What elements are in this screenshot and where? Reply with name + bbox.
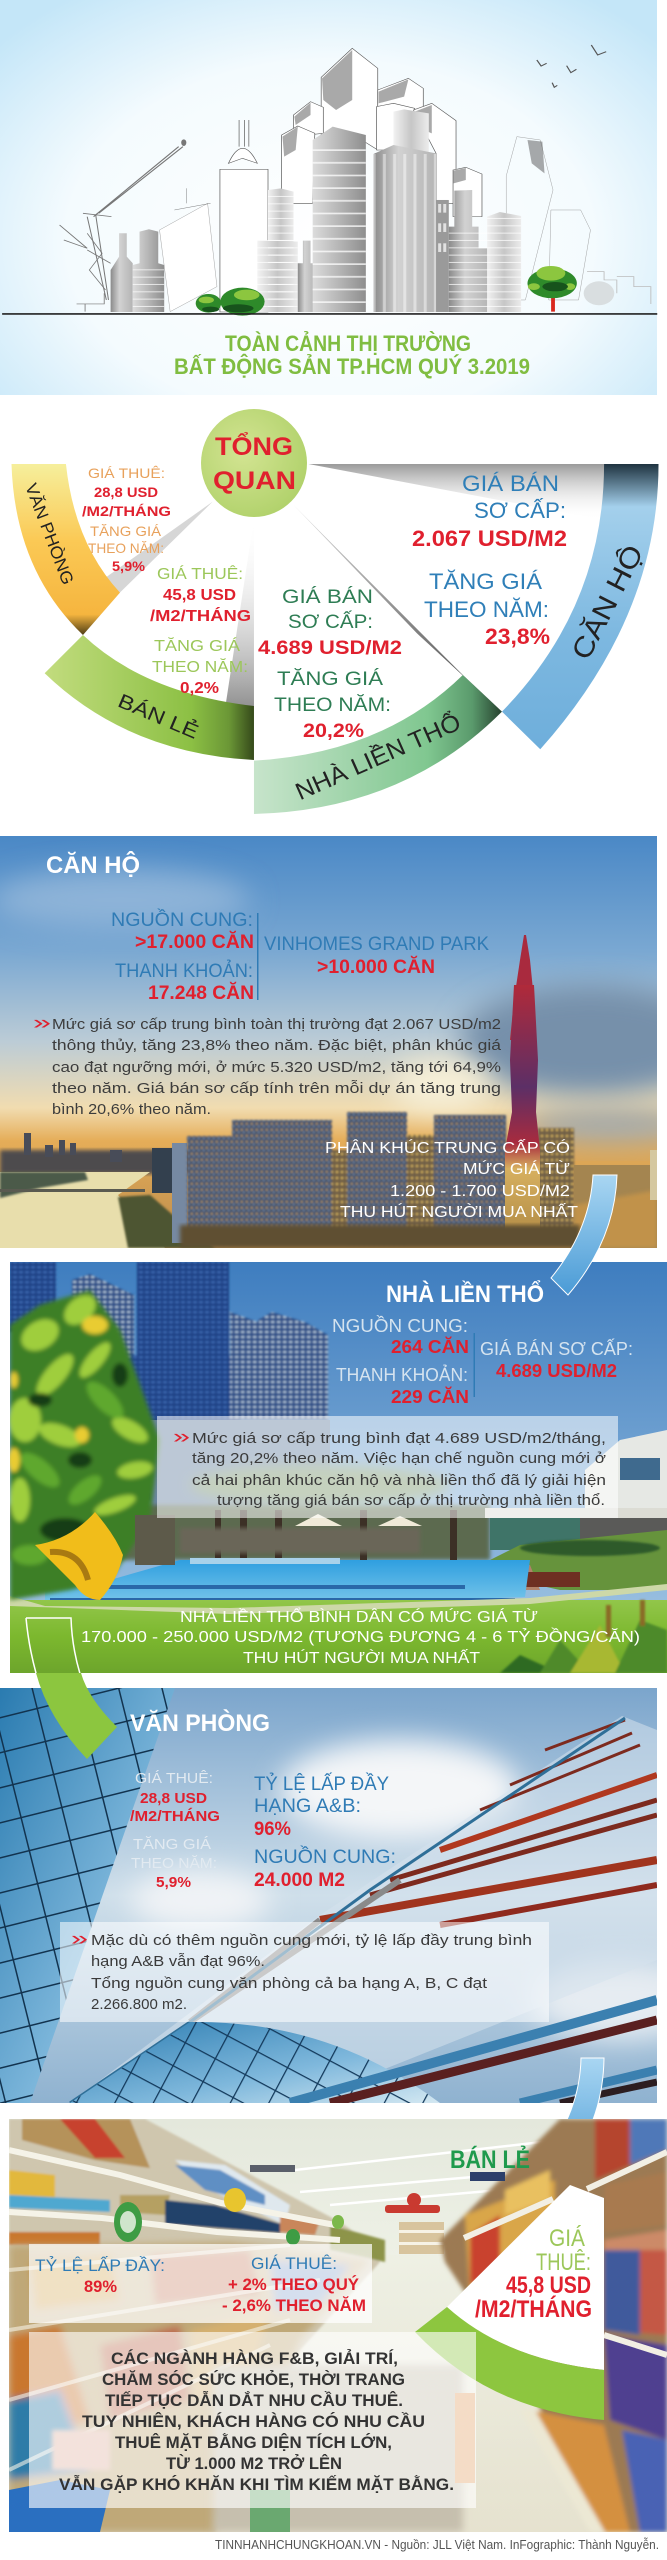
- callout box: price commentary: »: [173, 1427, 190, 1448]
- band label: Bán lẻ: BÁN LẺ: [115, 689, 202, 744]
- fan shading wedges and coloured bands: [11, 464, 659, 814]
- arrow: blue swoosh linking Văn phòng to Bán lẻ: [538, 2058, 604, 2179]
- stats: Văn phòng: THEO NĂM:: [88, 540, 164, 556]
- bullet paragraph: cao đạt ngưỡng mới, ở mức 5.320 USD/m2, tăng tới 64,9%: [52, 1059, 501, 1076]
- callout box: tenant demand commentary: VẪN GẶP KHÓ KHĂN KHI TÌM KIẾM MẶT BẰNG.: [59, 2475, 454, 2494]
- stats: occupancy and supply: 96%: [254, 1819, 291, 1840]
- callout box: occupancy commentary: 2.266.800 m2.: [91, 1996, 187, 2013]
- stats: Bán lẻ: 45,8 USD: [163, 587, 236, 604]
- photo: Saigon skyline at sunset: [0, 836, 667, 1248]
- fan segment: white wedge with green band: [415, 2185, 604, 2420]
- band label: Căn hộ: CĂN HỘ: [565, 540, 649, 665]
- photo: glass towers against the sky: [0, 1688, 667, 2103]
- photo: supermarket aisle: [9, 2119, 667, 2532]
- hero sky background: [0, 0, 657, 395]
- callout: mid-range segment: MỨC GIÁ TỪ: [463, 1159, 570, 1178]
- photo: villas, towers and pool: [8, 1262, 667, 1680]
- illustration: sketched city skyline: [2, 45, 657, 316]
- right shelving: [440, 2119, 667, 2532]
- stats: occupancy and supply: 24.000 M2: [254, 1870, 345, 1891]
- bullet paragraph: bình 20,6% theo năm.: [52, 1101, 211, 1118]
- band label: Văn phòng: VĂN PHÒNG: [21, 481, 77, 587]
- callout box: price commentary: tượng tăng giá bán sơ cấp ở thị trường nhà liền thổ.: [217, 1492, 605, 1509]
- stats: Bán lẻ: 0,2%: [180, 680, 219, 697]
- callout box: tenant demand commentary: CÁC NGÀNH HÀNG F&B, GIẢI TRÍ,: [111, 2349, 398, 2368]
- stats: supply, liquidity and price: GIÁ BÁN SƠ CẤP:: [480, 1338, 633, 1359]
- stats: Căn hộ: THEO NĂM:: [424, 597, 549, 622]
- stats: rent and growth: GIÁ THUÊ:: [135, 1770, 213, 1787]
- band label: Nhà liền thổ: NHÀ LIỀN THỔ: [291, 708, 465, 806]
- callout: popular price range: NHÀ LIỀN THỔ BÌNH DÂN CÓ MỨC GIÁ TỪ: [180, 1607, 538, 1626]
- callout box: tenant demand commentary: TUY NHIÊN, KHÁCH HÀNG CÓ NHU CẦU: [82, 2412, 425, 2431]
- heading: NHÀ LIỀN THỔ: [386, 1280, 544, 1308]
- stats: Bán lẻ: TĂNG GIÁ: [154, 636, 240, 655]
- stats: supply and liquidity: [111, 909, 489, 1004]
- callout box: tenant demand commentary: TỪ 1.000 M2 TRỞ LÊN: [166, 2454, 342, 2473]
- panel: Căn hộ: [0, 836, 667, 1248]
- callout: mid-range segment: THU HÚT NGƯỜI MUA NHẤT: [340, 1202, 578, 1221]
- stats: Bán lẻ: GIÁ THUÊ:: [157, 564, 243, 583]
- circle: Tổng quan: QUAN: [213, 467, 296, 495]
- stats: rent and growth: [130, 1770, 220, 1891]
- stats: rent and growth: THEO NĂM:: [131, 1855, 217, 1872]
- bullet paragraph: theo năm. Giá bán sơ cấp tính trên mỗi dự án tăng trung: [52, 1080, 501, 1097]
- callout box: occupancy commentary: [60, 1922, 549, 2022]
- callout box: occupancy and rent change: GIÁ THUÊ:: [251, 2254, 337, 2273]
- stats: Căn hộ: GIÁ BÁN: [462, 471, 559, 496]
- stats: occupancy and supply: HẠNG A&B:: [254, 1796, 361, 1817]
- stats: retail rent: /M2/THÁNG: [475, 2295, 592, 2323]
- callout box: occupancy and rent change: TỶ LỆ LẤP ĐẦY:: [35, 2256, 165, 2275]
- stats: Văn phòng: GIÁ THUÊ:: [88, 465, 165, 481]
- stats: supply, liquidity and price: 229 CĂN: [391, 1386, 469, 1407]
- stats: supply and liquidity: THANH KHOẢN:: [115, 960, 253, 982]
- stats: Căn hộ: 23,8%: [485, 624, 550, 649]
- callout box: price commentary: [157, 1416, 618, 1518]
- back wall shelves: [399, 2222, 444, 2254]
- panel: overview fan diagram: [11, 409, 659, 814]
- callout box: occupancy and rent change: [29, 2244, 372, 2323]
- bullet paragraph: thông thủy, tăng 23,8% theo năm. Đặc biệt, phân khúc giá: [52, 1037, 502, 1054]
- stats: rent and growth: 5,9%: [156, 1874, 191, 1891]
- stats: rent and growth: /M2/THÁNG: [130, 1808, 220, 1825]
- arrow: blue swoosh linking Căn hộ to Nhà liền thổ: [551, 1175, 617, 1295]
- heading: VĂN PHÒNG: [130, 1709, 270, 1737]
- title: [174, 331, 530, 379]
- stats: retail rent: [475, 2225, 592, 2323]
- stats: rent and growth: 28,8 USD: [140, 1790, 207, 1807]
- stats: Văn phòng: 28,8 USD: [94, 484, 158, 500]
- callout: mid-range segment: 1.200 - 1.700 USD/M2: [390, 1183, 570, 1200]
- panel: Nhà liền thổ: [8, 1262, 667, 1680]
- callout: popular price range: THU HÚT NGƯỜI MUA NHẤT: [243, 1648, 480, 1667]
- stats: Văn phòng: 5,9%: [112, 558, 146, 574]
- callout: popular price range: [81, 1607, 640, 1667]
- callout box: tenant demand commentary: [29, 2332, 476, 2508]
- tree foliage: [8, 1289, 160, 1600]
- stats: Nhà liền thổ: SƠ CẤP:: [288, 611, 373, 633]
- stats: Nhà liền thổ: 4.689 USD/M2: [258, 638, 402, 659]
- stats: rent and growth: TĂNG GIÁ: [133, 1836, 211, 1853]
- stats: Nhà liền thổ: GIÁ BÁN: [282, 587, 373, 608]
- stats: Văn phòng: [82, 465, 171, 574]
- stats: retail rent: THUÊ:: [536, 2249, 591, 2276]
- stats: retail rent: GIÁ: [549, 2225, 585, 2252]
- callout box: tenant demand commentary: CHĂM SÓC SỨC KHỎE, THỜI TRANG: [102, 2370, 405, 2389]
- stats: supply, liquidity and price: THANH KHOẢN:: [336, 1364, 468, 1385]
- callout box: tenant demand commentary: TIẾP TỤC DẪN DẮT NHU CẦU THUÊ.: [105, 2391, 403, 2410]
- callout box: occupancy commentary: Tổng nguồn cung văn phòng cả ba hạng A, B, C đạt: [91, 1975, 488, 1992]
- stats: retail rent: 45,8 USD: [506, 2272, 591, 2299]
- stats: supply, liquidity and price: [332, 1315, 633, 1407]
- stats: Nhà liền thổ: 20,2%: [303, 721, 364, 742]
- stats: occupancy and supply: NGUỒN CUNG:: [254, 1846, 396, 1868]
- stats: Văn phòng: TĂNG GIÁ: [90, 523, 162, 539]
- callout box: occupancy commentary: Mặc dù có thêm nguồn cung mới, tỷ lệ lấp đầy trung bình: [91, 1932, 532, 1949]
- callout box: occupancy and rent change: 89%: [84, 2277, 117, 2296]
- panel: Văn phòng: [0, 1175, 667, 2179]
- stats: Căn hộ: SƠ CẤP:: [474, 498, 566, 523]
- heading: BÁN LẺ: [450, 2144, 530, 2174]
- circle: Tổng quan: TỔNG: [215, 431, 293, 461]
- stats: supply and liquidity: VINHOMES GRAND PARK: [264, 934, 489, 955]
- callout box: price commentary: cả hai phân khúc căn hộ và nhà liền thổ đã lý giải hiện: [192, 1472, 606, 1489]
- stats: occupancy and supply: [254, 1773, 396, 1891]
- panel: Bán lẻ: [9, 2119, 667, 2532]
- stats: Bán lẻ: [150, 564, 251, 697]
- callout box: occupancy commentary: hạng A&B vẫn đạt 96%.: [91, 1953, 265, 1970]
- flower: [35, 1512, 123, 1600]
- stats: Căn hộ: TĂNG GIÁ: [429, 569, 542, 594]
- callout box: occupancy and rent change: + 2% THEO QUÝ: [228, 2275, 360, 2294]
- title: TOÀN CẢNH THỊ TRƯỜNG: [225, 331, 471, 356]
- panel: hero header: [0, 0, 657, 395]
- stats: Bán lẻ: THEO NĂM:: [152, 657, 248, 676]
- callout box: tenant demand commentary: THUÊ MẶT BẰNG DIỆN TÍCH LỚN,: [115, 2433, 392, 2452]
- stats: Văn phòng: /M2/THÁNG: [82, 503, 171, 519]
- callout: mid-range segment: [325, 1138, 578, 1221]
- callout: mid-range segment: PHÂN KHÚC TRUNG CẤP CÓ: [325, 1138, 570, 1157]
- stats: supply and liquidity: 17.248 CĂN: [148, 982, 254, 1004]
- callout box: price commentary: tăng 20,2% theo năm. Việc hạn chế nguồn cung mới ở: [192, 1450, 606, 1467]
- callout: popular price range: 170.000 - 250.000 USD/M2 (TƯƠNG ĐƯƠNG 4 - 6 TỶ ĐỒNG/CĂN): [81, 1627, 640, 1646]
- stats: supply and liquidity: NGUỒN CUNG:: [111, 909, 253, 931]
- callout box: occupancy commentary: »: [71, 1929, 88, 1950]
- stats: supply and liquidity: >10.000 CĂN: [317, 956, 435, 978]
- stats: supply, liquidity and price: NGUỒN CUNG:: [332, 1315, 468, 1336]
- stats: Nhà liền thổ: THEO NĂM:: [274, 695, 391, 716]
- stats: Nhà liền thổ: TĂNG GIÁ: [277, 669, 383, 690]
- cart and shopper: [213, 2365, 463, 2532]
- stats: Nhà liền thổ: [258, 587, 402, 742]
- heading: CĂN HỘ: [46, 851, 140, 879]
- stats: supply, liquidity and price: 4.689 USD/M2: [496, 1361, 617, 1381]
- callout box: occupancy and rent change: - 2,6% THEO NĂM: [222, 2296, 366, 2315]
- stats: Căn hộ: 2.067 USD/M2: [412, 526, 567, 551]
- left shelving: [9, 2119, 385, 2532]
- circle: Tổng quan: [201, 409, 307, 517]
- stats: occupancy and supply: TỶ LỆ LẤP ĐẦY: [254, 1773, 389, 1795]
- callout box: price commentary: Mức giá sơ cấp trung bình đạt 4.689 USD/m2/tháng,: [192, 1430, 606, 1447]
- stats: supply and liquidity: >17.000 CĂN: [135, 931, 254, 953]
- stats: Bán lẻ: /M2/THÁNG: [150, 606, 251, 625]
- stats: Căn hộ: [412, 471, 567, 649]
- bullet paragraph: »: [33, 1013, 51, 1034]
- arrow: green swoosh linking panels: [33, 1673, 117, 1759]
- bullet paragraph: [33, 1013, 502, 1118]
- title: BẤT ĐỘNG SẢN TP.HCM QUÝ 3.2019: [174, 354, 530, 379]
- stats: supply, liquidity and price: 264 CĂN: [391, 1336, 469, 1357]
- bullet paragraph: Mức giá sơ cấp trung bình toàn thị trường đạt 2.067 USD/m2: [52, 1016, 501, 1033]
